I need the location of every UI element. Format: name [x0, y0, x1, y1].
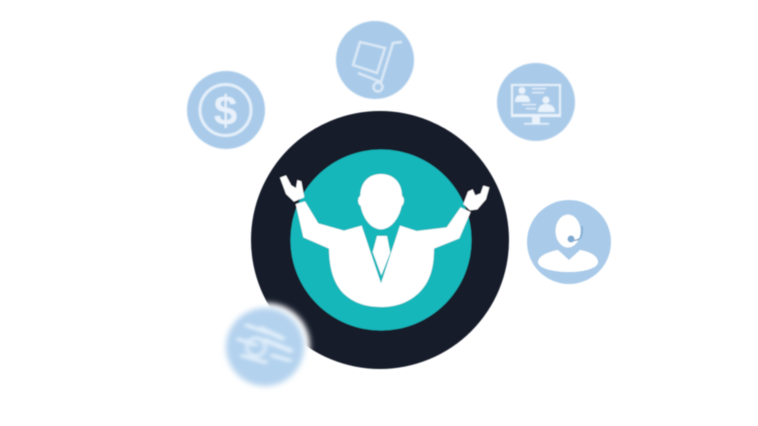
- icon: left hand: [280, 175, 304, 202]
- icon: right hand: [463, 186, 489, 210]
- icon: customer support agent with headset: [527, 200, 611, 284]
- icon: dollar coin: $: [214, 87, 237, 134]
- icon: hand truck with box: [336, 21, 414, 99]
- central hub: dark ring with teal disc and businessman: [251, 111, 509, 369]
- icon: monitor with video call: [497, 63, 575, 141]
- icon: businessman with raised arms: [280, 174, 489, 307]
- icon: dollar coin: [187, 71, 265, 149]
- icon: motion-blurred spinning circle: [224, 303, 310, 389]
